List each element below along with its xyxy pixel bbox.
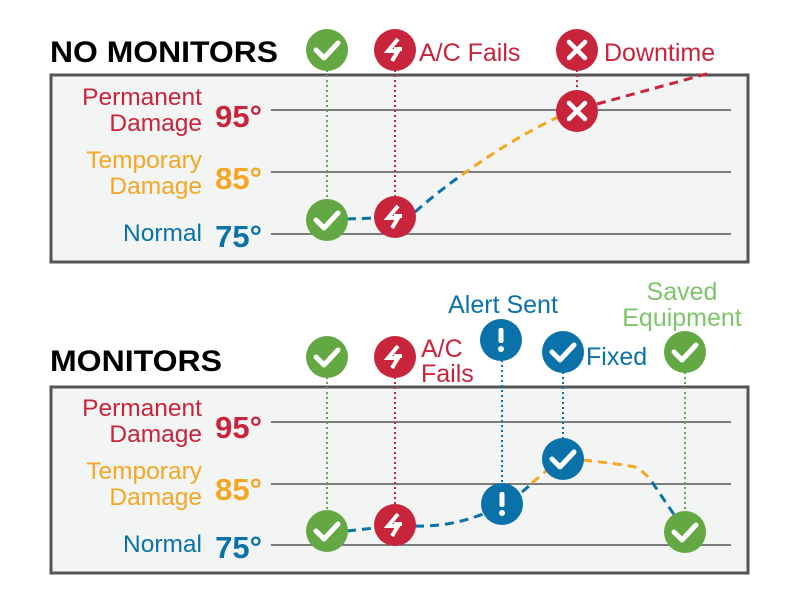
dotted guides: [327, 70, 577, 200]
panel: monitors: Saved: [647, 278, 717, 306]
axis labels bottom: 85°: [215, 472, 262, 507]
chart box top: [51, 75, 748, 262]
panel: monitors: Fixed: [586, 343, 647, 371]
curve bottom: [347, 460, 675, 531]
axis labels bottom: 95°: [215, 410, 262, 445]
panel: monitors: Fails: [421, 360, 474, 388]
panel: no monitors: A/C Fails: [419, 39, 520, 67]
axis labels bottom: Normal: [123, 531, 202, 558]
dotted guides bottom: [327, 360, 685, 512]
title: no monitors: NO MONITORS: [50, 36, 278, 69]
chart box bottom: [51, 387, 748, 573]
axis labels top: 95°: [215, 99, 262, 134]
legend icons top: [306, 29, 348, 71]
axis labels top: 85°: [215, 161, 262, 196]
axis labels bottom: Damage: [109, 484, 202, 511]
axis labels top: Normal: [123, 220, 202, 247]
panel: monitors: [50, 278, 748, 573]
axis labels bottom: Temporary: [86, 458, 203, 485]
axis labels top: Temporary: [86, 147, 203, 174]
curve top: [347, 73, 710, 219]
title: monitors: MONITORS: [50, 345, 222, 378]
panel: monitors: Equipment: [622, 304, 742, 332]
axis labels top: Damage: [109, 110, 202, 137]
axis labels top: [82, 84, 262, 254]
axis labels top: Permanent: [82, 84, 202, 111]
markers bottom: [306, 510, 348, 552]
panel: monitors: A/C: [421, 335, 463, 363]
markers top: [306, 199, 348, 241]
panel: no monitors: [50, 29, 748, 262]
axis labels bottom: Damage: [109, 421, 202, 448]
panel: no monitors: Downtime: [604, 39, 715, 67]
axis labels bottom: 75°: [215, 530, 262, 565]
axis labels top: 75°: [215, 219, 262, 254]
legend icons bottom: [306, 336, 348, 378]
axis labels bottom: Permanent: [82, 395, 202, 422]
panel: monitors: Alert Sent: [448, 291, 558, 319]
axis labels bottom: [82, 395, 262, 565]
axis labels top: Damage: [109, 173, 202, 200]
